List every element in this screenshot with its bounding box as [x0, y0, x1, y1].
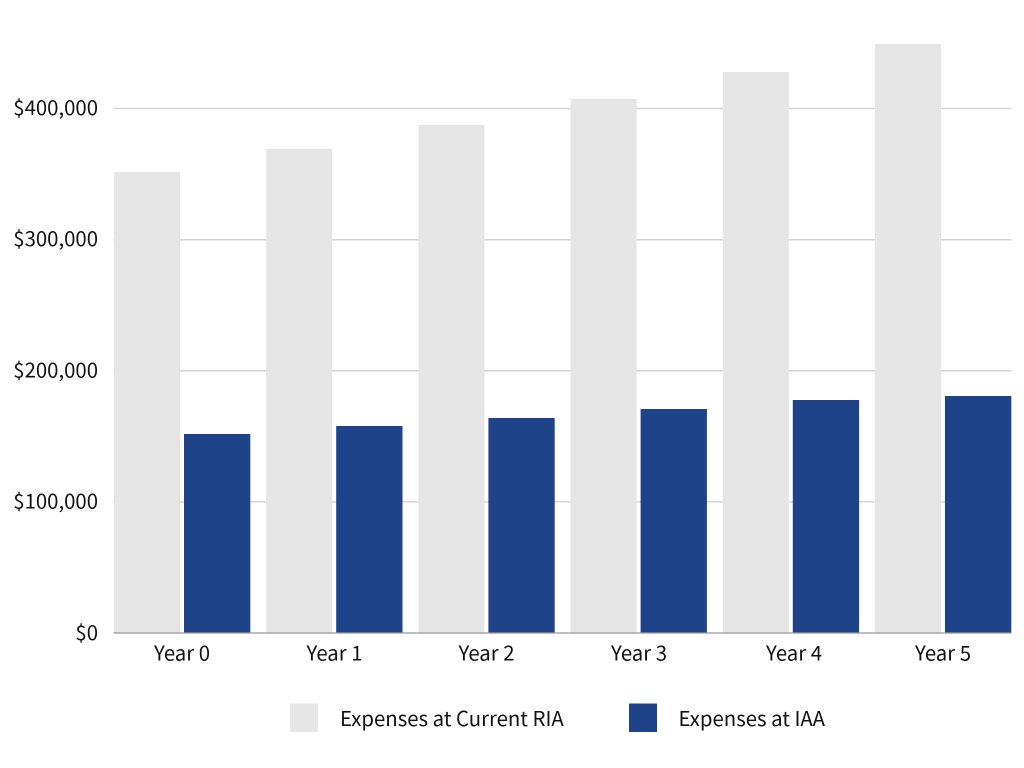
x axis labels [153, 636, 971, 666]
legend [290, 702, 826, 732]
x axis line [114, 632, 1012, 634]
y axis labels: $200,000 [13, 354, 98, 384]
x axis labels: Year 2 [457, 636, 515, 666]
y axis labels: $400,000 [13, 91, 98, 121]
x axis labels: Year 1 [305, 636, 363, 666]
legend item: IAA: Expenses at IAA [678, 702, 826, 732]
x axis labels: Year 3 [610, 636, 667, 666]
y axis labels: $100,000 [13, 484, 98, 514]
bars: expenses at IAA [184, 396, 1011, 633]
legend item: current RIA: Expenses at Current RIA [340, 702, 564, 732]
y axis labels: $0 [75, 616, 98, 646]
y axis labels [13, 91, 98, 646]
x axis labels: Year 4 [765, 636, 822, 666]
y axis labels: $300,000 [13, 222, 98, 252]
bars: expenses at current RIA [114, 44, 941, 633]
x axis labels: Year 0 [153, 636, 210, 666]
x axis labels: Year 5 [914, 636, 971, 666]
